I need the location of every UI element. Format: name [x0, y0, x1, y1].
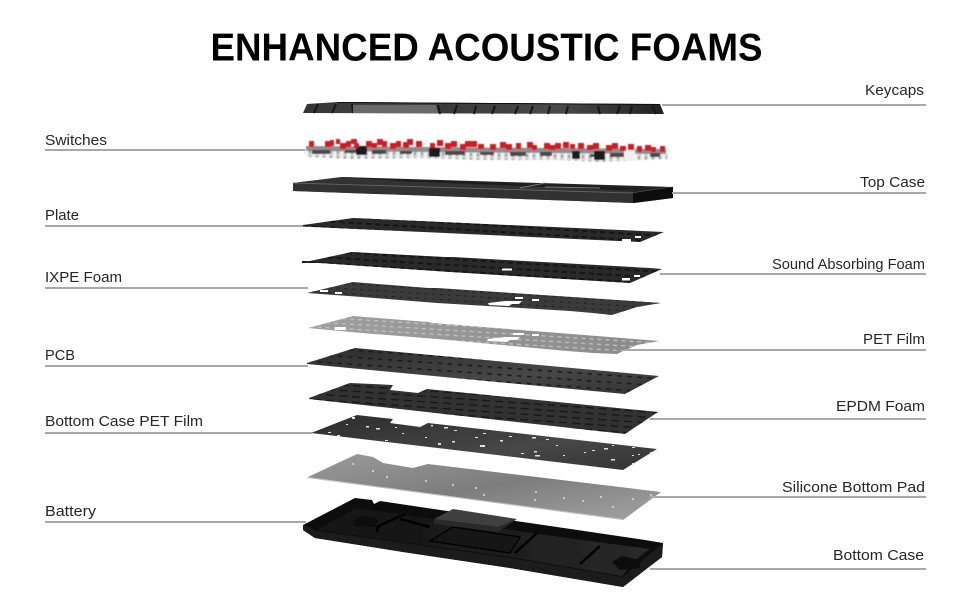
layer: EPDM foam [309, 383, 658, 434]
red stems [309, 139, 665, 152]
layer: plate [303, 218, 664, 242]
internal ribs [377, 514, 600, 564]
layer: sound absorbing foam [302, 252, 662, 283]
label: Keycaps: Keycaps [865, 82, 924, 99]
label: Plate: Plate [45, 207, 79, 224]
label: Bottom Case: Bottom Case [833, 547, 924, 564]
case floor [317, 508, 650, 576]
layer: silicone bottom pad [308, 454, 661, 520]
switch housings [306, 146, 666, 154]
label: IXPE Foam: IXPE Foam [45, 269, 122, 286]
label: Bottom Case PET Film: Bottom Case PET Film [45, 413, 203, 430]
label: PCB: PCB [45, 347, 75, 364]
layer: PCB [307, 348, 659, 394]
label: EPDM Foam: EPDM Foam [836, 398, 925, 415]
layer: PET film [308, 316, 659, 354]
label: Switches: Switches [45, 132, 107, 149]
layer: bottom case PET film [311, 415, 657, 470]
case front wall [303, 525, 663, 587]
label: Top Case: Top Case [860, 174, 925, 191]
label: Battery: Battery [45, 503, 97, 520]
battery [434, 509, 517, 532]
label: Sound Absorbing Foam: Sound Absorbing Foam [772, 256, 925, 273]
inner tray [430, 527, 520, 553]
white switch [624, 149, 635, 160]
label: Silicone Bottom Pad: Silicone Bottom Pad [782, 479, 925, 496]
black switches [356, 146, 605, 160]
layer: bottom case [303, 498, 663, 587]
label: PET Film: PET Film [863, 331, 925, 348]
layer: top case [293, 177, 673, 203]
layer: keycaps [303, 102, 664, 114]
title: ENHANCED ACOUSTIC FOAMS [210, 27, 762, 70]
layer: IXPE foam [307, 282, 661, 315]
layer: switches [304, 139, 668, 162]
mounting holes [328, 417, 653, 464]
